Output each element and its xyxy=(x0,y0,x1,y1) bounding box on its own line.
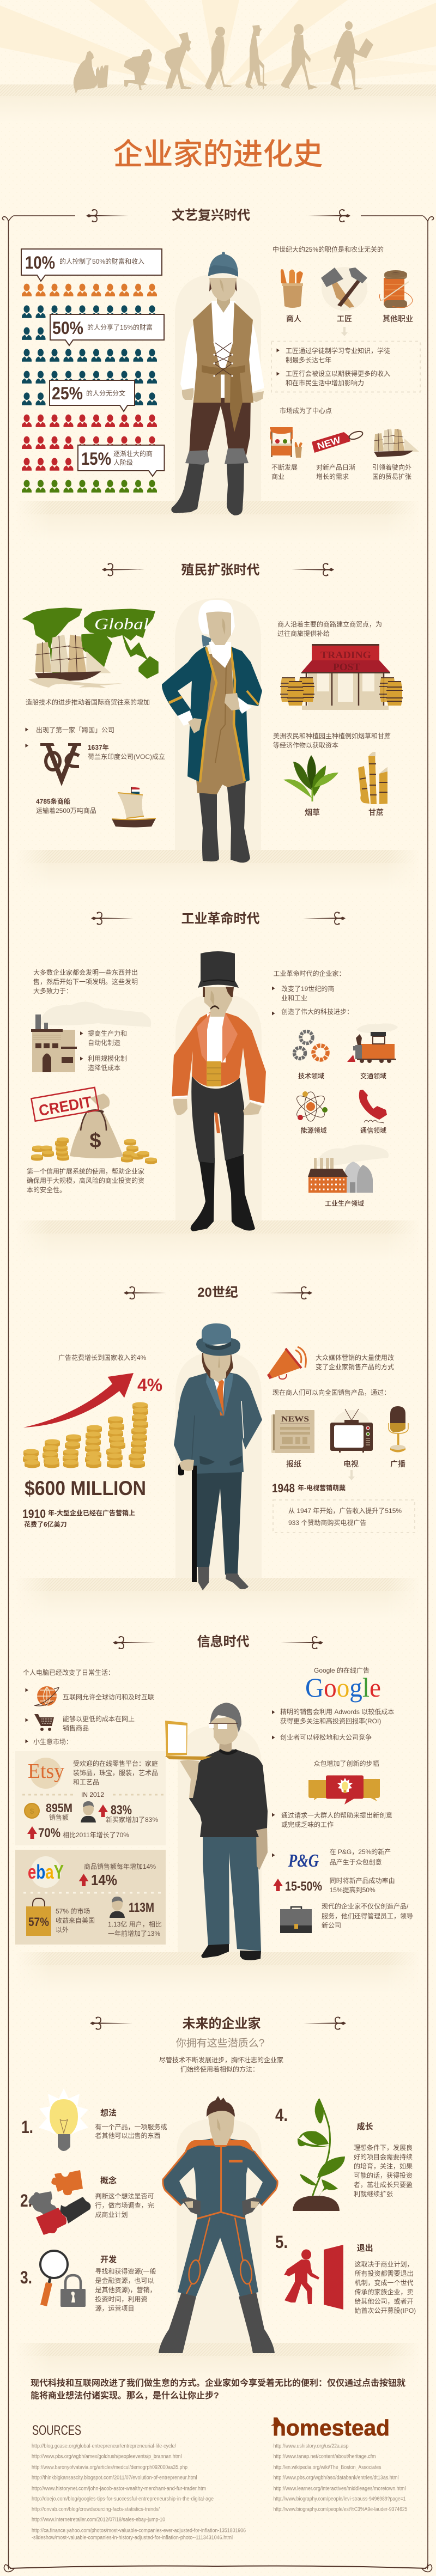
panel: future entrepreneurs xyxy=(16,2016,420,2384)
panel: Etsy: 70% xyxy=(38,1826,60,1840)
text: modern entrepreneur: 现代的企业家不仅仅创造产品/ xyxy=(322,1902,409,1910)
heading: sources: SOURCES xyxy=(32,2423,81,2438)
panel: eBay: 商品销售额每年增加14% xyxy=(84,1862,156,1870)
step 1: idea xyxy=(21,2088,167,2151)
panel: Etsy: 新买家增加了83% xyxy=(106,1815,158,1824)
figure: 20th century businessman xyxy=(174,1323,262,1590)
step 2: concept: 2. xyxy=(20,2191,32,2210)
heading: colonial: 殖民扩张时代 xyxy=(181,563,259,578)
bullets: adwords: 获得更多关注和高投资回报率(ROI) xyxy=(280,1717,381,1725)
text: mass media: 大众媒体营销的大量使用改 xyxy=(316,1353,394,1362)
panel: eBay: 收益来自美国 xyxy=(56,1917,95,1924)
labels: tech and transport: 交通领域 xyxy=(360,1072,386,1080)
label: industrial production: 工业生产领域 xyxy=(325,1200,364,1207)
step 1: idea: 有一个产品，一项服务或 xyxy=(95,2123,167,2131)
step 5: exit: 始首次公开募股(IPO) xyxy=(354,2307,416,2314)
callout: 25%: 的人分无分文 xyxy=(86,389,125,397)
text: 1948: 年-电视营销萌蘖 xyxy=(298,1484,346,1492)
bullet: first multinational: 出现了第一家「跨国」公司 xyxy=(36,726,114,734)
panel: Etsy: 83% xyxy=(111,1803,132,1818)
dashed box: craftsmen: 和在市民生活中增加影响力 xyxy=(286,379,364,387)
figure: information age entrepreneur xyxy=(165,1703,268,1960)
step 1: idea: 想法 xyxy=(100,2108,117,2118)
text: 4785 ships: 4785条商船 xyxy=(36,797,70,805)
icon: atom xyxy=(294,1091,328,1121)
silhouette: stooped man in top hat xyxy=(165,32,192,89)
arrow: growth: 4% xyxy=(137,1375,162,1395)
figure backdrop arch xyxy=(175,994,262,1220)
text: market effects: 对新产品日渐 xyxy=(316,463,355,471)
bullet: small business: 小生意市场： xyxy=(33,1737,72,1746)
figure backdrop arch xyxy=(178,1726,262,1952)
panel: Etsy: 和工艺品 xyxy=(73,1778,99,1786)
figure backdrop arch xyxy=(175,1352,262,1578)
icon: market stall xyxy=(270,427,302,458)
text: 1948 xyxy=(272,1481,346,1495)
panel: eBay: 57% 的市场 xyxy=(56,1907,90,1915)
subheading: 你拥有这些潜质么? xyxy=(176,2037,264,2049)
step 3: development: 是金融资源，也可以 xyxy=(95,2276,154,2285)
world map with ship xyxy=(23,608,158,688)
labels: energy and telecom: 通信领域 xyxy=(360,1126,386,1134)
silhouette: crouching man xyxy=(124,49,152,90)
icon: sugarcane xyxy=(358,752,387,804)
text: VOC 1637: 1637年 xyxy=(88,743,109,751)
icon: locomotive with smoke xyxy=(347,1023,398,1063)
text: market effects: 商业 xyxy=(271,472,284,481)
text: credit system: 第一个信用扩展系统的使用，帮助企业家 xyxy=(27,1167,144,1175)
arrow down xyxy=(348,1470,355,1480)
main title: 企业家的进化史 xyxy=(113,137,323,171)
text: inventors xyxy=(33,968,138,995)
bullet: online selling with cart: 销售商品 xyxy=(63,1724,89,1732)
logo: homestead: homestead xyxy=(272,2415,390,2440)
step 3: development xyxy=(20,2251,156,2312)
icon: VOC boat xyxy=(112,787,156,827)
text: VOC 1637: 荷兰东印度公司(VOC)成立 xyxy=(88,752,165,761)
text: VOC 1637 xyxy=(88,743,165,761)
text: mass media xyxy=(316,1353,394,1371)
callout: 50%: 50% xyxy=(52,318,83,338)
figure: $600 million: $600 MILLION xyxy=(25,1477,146,1499)
world map with ship: Global xyxy=(94,615,149,633)
logo and text: P&G: P&G xyxy=(288,1851,319,1871)
text: cash crops xyxy=(273,732,391,749)
labels: tech and transport: 技术领域 xyxy=(298,1072,324,1080)
step 4: growth: 利就继续扩张 xyxy=(354,2190,393,2198)
callout: 15%: 逐渐壮大的商 xyxy=(113,449,153,458)
dashed box: craftsmen: 制最多长达七年 xyxy=(286,356,331,364)
panel: 20th century xyxy=(16,1285,420,1619)
source links: left: http://ca.finance.yahoo.com/photos/most-valuable-companies-ever-adjusted-for-inflation-1351801906 xyxy=(32,2528,246,2534)
icon: telephone xyxy=(359,1090,387,1123)
bullets: productivity: 造降低成本 xyxy=(88,1064,120,1072)
source links: left: http://doejo.com/blog/googles-tips-for-successful-entrepreneurship-in-the-digital-age xyxy=(32,2496,214,2502)
text: google online ads: Google 的在线广告 xyxy=(314,1666,370,1674)
text: ad spending: 广告花费增长到国家收入的4% xyxy=(58,1353,147,1362)
step 4: growth: 可能的话，获得投资 xyxy=(354,2171,413,2179)
text: market centre: 市场成为了中心点 xyxy=(280,406,332,415)
callout: 25%: 25% xyxy=(52,384,83,403)
labels: occupations: 商人 xyxy=(286,314,301,323)
bullets: adwords: 创业者可以轻松地和大公司竞争 xyxy=(280,1734,372,1741)
text: inventors: 售，然后开始下一项发明。这些发明 xyxy=(33,977,138,986)
callout: 10%: 10% xyxy=(25,253,55,272)
text: 1910: 花费了6亿美刀 xyxy=(24,1520,67,1528)
heading: future: 未来的企业家 xyxy=(182,2016,261,2031)
icon: trading post: TRADING xyxy=(320,649,371,660)
icon: NEW price tag xyxy=(312,430,364,453)
step 5: exit: 5. xyxy=(275,2232,288,2252)
silhouette: man with laptop xyxy=(330,21,373,90)
text: era entrepreneurs: 创造了伟大的科技进步： xyxy=(281,1007,353,1016)
icon: sailing ship xyxy=(374,429,419,457)
silhouette: strolling man xyxy=(281,24,318,90)
panel: industrial revolution xyxy=(16,911,420,1262)
icon: crowdsourcing speech bubbles xyxy=(308,1775,380,1805)
text: personal computer: 个人电脑已经改变了日常生活： xyxy=(23,1668,114,1676)
stat: 15-50%: 15%提高到50% xyxy=(330,1886,376,1894)
source links: right: http://www.biography.com/people/levi-strauss-9496989?page=1 xyxy=(274,2496,406,2502)
closing statement: 能将商业想法付诸实现。那么，是什么让你止步? xyxy=(31,2390,219,2401)
step 5: exit xyxy=(275,2232,416,2314)
callout: 10% xyxy=(21,249,162,281)
source links: right: http://www.learner.org/interactives/middleages/moretown.html xyxy=(274,2486,405,2492)
icon: television xyxy=(330,1409,373,1453)
icon: trading post: POST xyxy=(333,661,360,672)
icon: megaphone xyxy=(268,1347,306,1379)
logo and text: P&G: 在 P&G，25%的新产 xyxy=(330,1848,391,1856)
panel: eBay: 一年前增加了13% xyxy=(108,1929,160,1937)
icon: tobacco xyxy=(283,755,338,801)
bullets: productivity: 利用规模化制 xyxy=(88,1054,127,1062)
source links: right: http://www.ushistory.org/us/22a.asp xyxy=(274,2443,349,2450)
source links: left: http://blog.gcase.org/global-entrepreneur/entrepreneurial-life-cycle/ xyxy=(32,2443,176,2450)
icon: briefcase xyxy=(280,1907,312,1933)
bullet: online selling with cart: 能够以更低的成本在网上 xyxy=(63,1715,135,1723)
icon: money bag with coins: $ xyxy=(89,1129,101,1152)
bullet: internet with globe xyxy=(25,1686,154,1706)
bullet: crowd ideas: 或完成乏味的工作 xyxy=(281,1820,334,1828)
bullets: productivity: 提高生产力和 xyxy=(88,1029,127,1037)
figure: industrial entrepreneur xyxy=(172,951,266,1231)
step 3: development: 源，运营项目 xyxy=(95,2305,135,2312)
logo and text: P&G xyxy=(272,1848,391,1871)
icon: crossed hammers xyxy=(321,267,367,311)
heading: industrial xyxy=(91,911,346,926)
step 5: exit: 给其他公司，或者开 xyxy=(354,2298,414,2305)
text: 1910: 年-大型企业已经在广告营销上 xyxy=(48,1509,135,1517)
bullet: internet with globe: 互联网允许全球访问和及时互联 xyxy=(63,1693,154,1701)
text: inventors: 大多致力于： xyxy=(33,987,72,995)
source links: left: http://onvab.com/blog/crowdsourcing-facts-statistics-trends/ xyxy=(32,2506,160,2513)
panel: colonial expansion xyxy=(16,563,420,891)
step 5: exit: 退出 xyxy=(357,2244,373,2253)
header silhouettes: evolution of the entrepreneur xyxy=(74,21,373,94)
text: credit system: 本的安全性。 xyxy=(27,1186,66,1194)
step 2: concept: 判断这个想法是否可 xyxy=(95,2192,154,2200)
labels: crops: 甘蔗 xyxy=(368,808,384,817)
silhouette: seated merchant xyxy=(74,51,108,94)
arrow down xyxy=(341,327,348,336)
bullets: productivity xyxy=(80,1029,127,1072)
heading: 20th century xyxy=(124,1285,312,1300)
source links: right: http://en.wikipedia.org/wiki/The_Boston_Associates xyxy=(274,2465,382,2470)
closing statement: 现代科技和互联网改进了我们做生意的方式。企业家如今享受着无比的便利：仅仅通过点击按钮就 xyxy=(31,2378,405,2388)
source links: right: http://www.pbs.org/wgbh/aso/databank/entries/dt13as.html xyxy=(274,2475,399,2481)
text: era entrepreneurs: 工业革命时代的企业家： xyxy=(274,969,346,977)
labels: media: 广播 xyxy=(390,1460,405,1468)
intro text xyxy=(159,2056,283,2073)
panel: eBay: 113M xyxy=(129,1900,154,1915)
step 1: idea: 者其他可以出售的东西 xyxy=(95,2131,161,2140)
step 3: development: 开发 xyxy=(100,2255,117,2264)
step 5: exit: 机制，变成一个世代 xyxy=(354,2279,414,2287)
figure backdrop arch xyxy=(175,274,261,501)
labels: occupations: 工匠 xyxy=(337,314,352,323)
text: modern entrepreneur xyxy=(322,1902,413,1929)
text: cash crops: 等经济作物以获取资本 xyxy=(273,741,338,749)
step 2: concept: 成商业计划 xyxy=(95,2210,128,2219)
step 3: development: 投资时间，利用资 xyxy=(95,2295,148,2303)
text: market effects: 增长的需求 xyxy=(316,472,349,481)
bullet: crowd ideas xyxy=(272,1811,392,1828)
step 5: exit: 这取决于商业计划， xyxy=(354,2260,414,2268)
panel: Etsy: 相比2011年增长了70% xyxy=(63,1831,129,1839)
text: era entrepreneurs: 业和工业 xyxy=(281,994,307,1002)
heading: colonial xyxy=(102,563,334,578)
heading: information age xyxy=(113,1635,323,1649)
callout: 25% xyxy=(50,380,135,411)
callout: 50%: 的人分享了15%的财富 xyxy=(87,323,153,331)
source links: left: http://thinkbigkansascity.blogspot.com/2011/07/evolution-of-entrepreneur.html xyxy=(32,2475,197,2481)
stat: 15-50%: 同时将新产品成功率由 xyxy=(330,1876,395,1885)
step 2: concept xyxy=(20,2170,154,2235)
intro text: 们始终使用着相似的方法： xyxy=(180,2065,259,2073)
panel: eBay: ebaY xyxy=(28,1861,64,1883)
callout: 15%: 人阶级 xyxy=(113,459,133,466)
labels: occupations xyxy=(286,314,413,323)
silhouette: old man with cane xyxy=(245,25,267,89)
source links: right: http://www.biography.com/people/est%C3%A9e-lauder-9374625 xyxy=(274,2506,408,2513)
text: cash crops: 美洲农民和种植园主种植例如烟草和甘蔗 xyxy=(273,732,391,740)
step 2: concept: 概念 xyxy=(100,2176,117,2185)
text: market effects: 不断发展 xyxy=(271,463,298,471)
text: shipbuilding: 造船技术的进步推动着国际商贸往来的增加 xyxy=(26,698,150,706)
source links: left: http://www.pbs.org/wgbh/amex/goldrush/peopleevents/p_brannan.html xyxy=(32,2454,182,2459)
icon: NEW price tag: NEW xyxy=(316,434,342,452)
step 4: growth: 者，茁壮成长只要盈 xyxy=(354,2181,413,2189)
step 3: development: 3. xyxy=(20,2268,32,2287)
text: crowdsourcing: 众包增加了创新的步幅 xyxy=(314,1759,379,1767)
icon: newspaper: NEWS xyxy=(281,1415,309,1424)
panel: Etsy xyxy=(15,1751,166,1845)
panel: eBay xyxy=(15,1850,166,1945)
icon: industrial buildings xyxy=(308,1145,389,1193)
callout: 15%: 15% xyxy=(81,449,111,469)
bullet: crowd ideas: 通过请求一大群人的帮助来提出新创意 xyxy=(281,1811,392,1819)
labels: media xyxy=(286,1460,405,1468)
source links: right: http://www.tanap.net/content/about/heritage.cfm xyxy=(274,2454,376,2459)
source links: left: -slideshow/most-valuable-companies-in-history-adjusted-for-inflation-photo--1113431046.html xyxy=(32,2535,233,2541)
labels: crops: 烟草 xyxy=(305,808,320,817)
heading: industrial: 工业革命时代 xyxy=(181,911,259,926)
step 1: idea: 1. xyxy=(21,2117,33,2137)
dashed box: craftsmen: 工匠行会被设立以期获得更多的收入 xyxy=(286,369,390,378)
panel: eBay: 14% xyxy=(91,1872,117,1888)
text: market effects: 国的贸易扩张 xyxy=(372,472,411,481)
source links: left: http://www.baronyofvatavia.org/articles/medcul/demogrph092000as35.php xyxy=(32,2465,187,2470)
panel: eBay: 以外 xyxy=(56,1926,69,1934)
text: modern entrepreneur: 新公司 xyxy=(322,1921,341,1929)
text: inventors: 大多数企业家都会发明一些东西并出 xyxy=(33,968,138,976)
callout: 10%: 的人控制了50%的财富和收入 xyxy=(59,257,144,265)
text: era entrepreneurs: 改变了19世纪的商 xyxy=(281,985,334,993)
stamp: CREDIT xyxy=(31,1087,99,1121)
heading: 20th century: 20世纪 xyxy=(197,1285,238,1300)
callout: 50% xyxy=(50,314,164,345)
panel: Etsy: 受欢迎的在线零售平台：家庭 xyxy=(73,1759,158,1767)
text: modern entrepreneur: 服务，他们还得管理员工，领导 xyxy=(322,1912,413,1920)
logo and text: P&G: 品产生于众包创意 xyxy=(330,1858,382,1866)
labels: crops xyxy=(305,808,384,817)
text: trading posts: 商人沿着主要的商路建立商贸点，为 xyxy=(277,620,382,628)
figure: future entrepreneur xyxy=(159,2096,277,2353)
header sunburst rays xyxy=(0,0,436,93)
dashed box: TV ad stats: 933 个赞助商购买电视广告 xyxy=(288,1518,366,1527)
text: era entrepreneurs xyxy=(272,969,353,1016)
text: 1910: 1910 xyxy=(22,1507,46,1521)
silhouette: walking man xyxy=(205,27,232,90)
figure: renaissance artisan xyxy=(171,252,264,515)
text: 25% non agricultural jobs: 中世纪大约25%的职位是和农业无关的 xyxy=(272,245,384,253)
heading: future xyxy=(90,2016,346,2031)
closing statement xyxy=(31,2378,405,2401)
text: 4785 ships: 运输着2500万吨商品 xyxy=(36,806,96,815)
text: market effects xyxy=(271,463,411,481)
labels: energy and telecom: 能源领域 xyxy=(300,1126,327,1134)
panel: Etsy: 装饰品，珠宝，服装，艺术品 xyxy=(73,1769,158,1777)
step 4: growth: 理想条件下，发展良 xyxy=(354,2143,413,2152)
step 4: growth: 的培育，关注，如果 xyxy=(354,2162,413,2170)
text: 4785 ships xyxy=(36,797,96,815)
dashed box: TV ad stats xyxy=(273,1500,415,1533)
panel: Etsy: 895M xyxy=(46,1801,72,1815)
text: trading posts: 过往商旅提供补给 xyxy=(277,629,330,637)
bullet: online selling with cart xyxy=(25,1714,135,1732)
step 3: development: 寻找和获得资源(一般 xyxy=(95,2267,156,2275)
intro text: 尽管技术不断发展进步，胸怀壮志的企业家 xyxy=(159,2056,283,2064)
icon: newspaper xyxy=(271,1410,314,1453)
step 3: development: 是其他资源)，营销， xyxy=(95,2286,156,2294)
stat: 15-50%: 15-50% xyxy=(285,1879,322,1894)
icon: gears xyxy=(294,1031,328,1060)
bullets: productivity: 自动化制造 xyxy=(88,1039,120,1047)
source links: left: http://www.internetretailer.com/2012/07/18/sales-ebay-jump-10 xyxy=(32,2517,165,2523)
labels: media: 报纸 xyxy=(286,1460,301,1468)
heading: renaissance: 文艺复兴时代 xyxy=(172,208,250,223)
step 5: exit: 传承的家族企业，卖 xyxy=(354,2288,414,2296)
text: credit system xyxy=(27,1167,144,1194)
source links: left xyxy=(32,2443,246,2541)
icon: trading post xyxy=(280,644,403,710)
source links: right xyxy=(274,2443,408,2513)
text: 1910 xyxy=(22,1507,135,1528)
step 4: growth xyxy=(275,2099,413,2211)
step 5: exit: 所有投资都需要退出 xyxy=(354,2269,414,2277)
people grid xyxy=(22,284,157,493)
heading: renaissance xyxy=(86,208,350,223)
panel: Etsy: 销售额 xyxy=(49,1813,69,1821)
bullets: adwords xyxy=(272,1708,394,1741)
text: market effects: 引领着驶向外 xyxy=(372,463,411,471)
step 4: growth: 成长 xyxy=(357,2122,373,2131)
step 4: growth: 好的项目会需要持续 xyxy=(354,2153,413,2161)
icon: microphone xyxy=(389,1406,408,1453)
figure: colonial merchant xyxy=(162,600,262,862)
bullets: adwords: 精明的销售会利用 Adwords 以较低成本 xyxy=(280,1708,394,1716)
labels: media: 电视 xyxy=(343,1460,359,1468)
panel: information age xyxy=(15,1635,420,1994)
labels: energy and telecom xyxy=(300,1126,386,1134)
text: sell nationally: 现在商人们可以向全国销售产品，通过： xyxy=(272,1388,390,1396)
stamp: CREDIT: CREDIT xyxy=(38,1093,93,1119)
callout: 15% xyxy=(78,445,165,476)
figure backdrop arch xyxy=(177,2118,262,2343)
figure backdrop arch xyxy=(175,598,261,850)
panel: eBay: 1.13亿 用户，相比 xyxy=(108,1920,162,1928)
step 4: growth: 4. xyxy=(275,2105,288,2125)
step 2: concept: 行，做市场调查，完 xyxy=(95,2201,154,2209)
stat: 15-50% xyxy=(273,1876,395,1894)
heading: information age: 信息时代 xyxy=(197,1635,250,1649)
panel: eBay: 57% xyxy=(28,1915,49,1929)
dashed box: craftsmen xyxy=(271,341,420,392)
icon: factory with smoke xyxy=(31,1002,151,1072)
dashed box: craftsmen: 工匠通过学徒制学习专业知识，学徒 xyxy=(286,347,390,355)
logo: Google: Google xyxy=(305,1672,381,1703)
text: credit system: 确保用于大规模，高风险的商业投资的资 xyxy=(27,1176,144,1184)
text: trading posts xyxy=(277,620,382,637)
chart: coin stacks xyxy=(23,1402,148,1468)
panel: Etsy: Etsy xyxy=(28,1760,64,1783)
icon: thread spool xyxy=(379,270,413,308)
icon: money bag with coins xyxy=(31,1093,157,1164)
logo: VOC xyxy=(25,743,81,786)
text: 1948: 1948 xyxy=(272,1481,295,1495)
arrow: growth xyxy=(23,1373,162,1427)
panel: Etsy: $ xyxy=(30,1807,34,1815)
labels: tech and transport xyxy=(298,1072,386,1080)
panel: renaissance xyxy=(16,208,420,543)
icon: bread basket xyxy=(281,269,303,308)
labels: occupations: 其他职业 xyxy=(383,314,413,323)
panel: Etsy: IN 2012 xyxy=(81,1791,104,1799)
text: mass media: 变了企业家销售产品的方式 xyxy=(316,1363,394,1371)
dashed box: TV ad stats: 从 1947 年开始，广告收入提升了515% xyxy=(288,1506,402,1515)
source links: left: http://www.historynet.com/john-jacob-astor-wealthy-merchant-and-fur-trader.htm xyxy=(32,2486,206,2492)
